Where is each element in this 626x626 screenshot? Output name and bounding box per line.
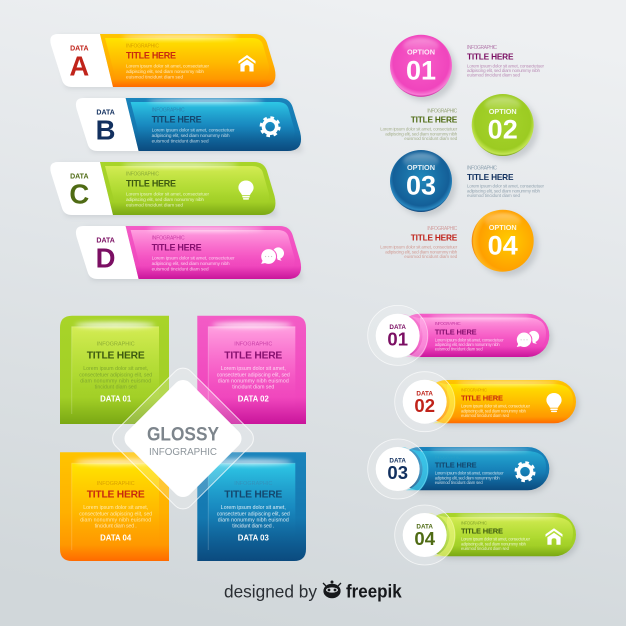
pill 02 orange: adipiscing elit, sed diam nonummy nibh bbox=[461, 408, 527, 413]
pill 01 pink: TITLE HERE bbox=[435, 327, 477, 336]
pill 04 green: 04 bbox=[414, 528, 436, 549]
option 02 text: adipiscing elit, sed diam nonummy nibh bbox=[385, 131, 458, 136]
option 04 text: Lorem ipsum dolor sit amet, consectetuer bbox=[380, 245, 458, 250]
text block A: INFOGRAPHIC bbox=[126, 43, 159, 49]
icon: freepik logo bbox=[323, 580, 341, 598]
pill 01 pink: adipiscing elit, sed diam nonummy nibh bbox=[435, 342, 500, 347]
text block B: TITLE HERE bbox=[152, 114, 202, 124]
pill 02 orange bbox=[395, 372, 579, 432]
text block C: Lorem ipsum dolor sit amet, consectetuer bbox=[126, 192, 209, 197]
panel: data 02 pink square bbox=[197, 316, 306, 424]
panel: data 01 green square: tincidunt diam sed bbox=[95, 385, 137, 391]
option 01 bbox=[390, 35, 456, 101]
panel: data 03 blue square: consectetuer adipiscing elit, sed bbox=[217, 511, 290, 517]
pill 04 green: adipiscing elit, sed diam nonummy nibh bbox=[461, 541, 527, 546]
banner A bbox=[50, 34, 277, 88]
option 01 text: INFOGRAPHIC bbox=[467, 45, 497, 51]
text block B: Lorem ipsum dolor sit amet, consectetuer bbox=[152, 128, 235, 133]
text block C: euismod tincidunt diam sed bbox=[126, 202, 183, 207]
icon: chat bbox=[261, 247, 284, 264]
pill 04 green: DATA bbox=[416, 523, 433, 530]
panel: data 04 orange square: tincidunt diam sed . bbox=[95, 524, 137, 530]
pill 03 blue: adipiscing elit, sed diam nonummy nibh bbox=[435, 475, 500, 480]
text block B: INFOGRAPHIC bbox=[152, 107, 185, 113]
text block C: adipiscing elit, sed diam nonummy nibh bbox=[126, 197, 204, 202]
panel: data 01 green square: INFOGRAPHIC bbox=[97, 342, 135, 348]
panel: data 04 orange square: consectetuer adipiscing elit, sed bbox=[79, 511, 152, 517]
label: data C: DATA bbox=[70, 174, 89, 181]
subheading: infographic: INFOGRAPHIC bbox=[149, 446, 217, 458]
center glossy diamond bbox=[108, 364, 258, 513]
panel: data 03 blue square: Lorem ipsum dolor sit amet, bbox=[221, 505, 286, 511]
text block C bbox=[126, 171, 209, 207]
option 02 text: euismod tincidunt diam sed bbox=[404, 136, 458, 141]
footer credit: designed by bbox=[224, 582, 317, 602]
pill 02 orange: 02 bbox=[414, 395, 435, 416]
option 03: OPTION bbox=[407, 163, 435, 172]
pill 04 green: Lorem ipsum dolor sit amet, consectetuer bbox=[461, 537, 531, 542]
option 02: OPTION bbox=[489, 107, 517, 116]
text block D: Lorem ipsum dolor sit amet, consectetuer bbox=[152, 256, 235, 261]
icon: house bbox=[238, 55, 256, 72]
option 03 text: euismod tincidunt diam sed bbox=[467, 193, 520, 198]
panel: data 03 blue square bbox=[197, 452, 306, 561]
text block D: TITLE HERE bbox=[152, 242, 202, 252]
banner C bbox=[50, 162, 277, 216]
icon: house bbox=[546, 528, 562, 545]
letter D: D bbox=[96, 243, 116, 274]
pill 02 orange: euismod tincidunt diam sed bbox=[461, 413, 510, 418]
panel: data 02 pink square: consectetuer adipiscing elit, sed bbox=[217, 372, 290, 378]
text block B: adipiscing elit, sed diam nonummy nibh bbox=[152, 133, 230, 138]
option 03 text: TITLE HERE bbox=[467, 172, 514, 182]
panel: data 02 pink square: TITLE HERE bbox=[224, 350, 282, 361]
text block D: INFOGRAPHIC bbox=[152, 235, 185, 241]
icon: bulb bbox=[546, 393, 562, 412]
text block A: Lorem ipsum dolor sit amet, consectetuer bbox=[126, 64, 209, 69]
panel: data 01 green square: DATA 01 bbox=[100, 395, 132, 404]
label: data B: DATA bbox=[96, 110, 115, 117]
pill 04 green: INFOGRAPHIC bbox=[461, 520, 487, 525]
panel: data 03 blue square: DATA 03 bbox=[238, 534, 269, 543]
pill 01 pink: 01 bbox=[387, 329, 408, 350]
option 02 text bbox=[380, 109, 458, 141]
option 03 text: adipiscing elit, sed diam nonummy nibh bbox=[467, 188, 540, 193]
footer credit bbox=[224, 580, 403, 602]
letter C: C bbox=[69, 179, 89, 210]
text block B bbox=[152, 107, 235, 143]
text block A: TITLE HERE bbox=[126, 50, 176, 60]
panel: data 04 orange square: DATA 04 bbox=[100, 534, 132, 543]
letter B: B bbox=[96, 115, 116, 146]
pill 04 green: euismod tincidunt diam sed bbox=[461, 546, 510, 551]
panel: data 03 blue square: tincidunt diam sed . bbox=[232, 524, 274, 530]
pill 03 blue: DATA bbox=[389, 457, 406, 464]
panel: data 04 orange square: Lorem ipsum dolor sit amet, bbox=[83, 505, 148, 511]
pill 03 blue: 03 bbox=[387, 462, 408, 483]
panel: data 01 green square: diam nonummy nibh euismod bbox=[80, 378, 151, 384]
option 01 text: euismod tincidunt diam sed bbox=[467, 73, 520, 78]
option 02 bbox=[472, 94, 538, 160]
option 02 text: Lorem ipsum dolor sit amet, consectetuer bbox=[380, 127, 458, 132]
text block D: euismod tincidunt diam sed bbox=[152, 266, 209, 271]
text block D bbox=[152, 235, 235, 271]
option 01 text: Lorem ipsum dolor sit amet, consectetuer bbox=[467, 63, 544, 68]
pill 04 green bbox=[395, 505, 579, 565]
option 01 text bbox=[467, 45, 544, 78]
option 04: OPTION bbox=[489, 223, 517, 232]
panel: data 04 orange square: INFOGRAPHIC bbox=[97, 481, 135, 487]
label: data A: DATA bbox=[70, 46, 89, 53]
pill 02 orange: DATA bbox=[416, 390, 433, 397]
panel: data 02 pink square: Lorem ipsum dolor sit amet, bbox=[221, 366, 286, 372]
text block D: adipiscing elit, sed diam nonummy nibh bbox=[152, 261, 230, 266]
option 01 text: TITLE HERE bbox=[467, 52, 514, 62]
icon: bulb bbox=[238, 180, 254, 200]
panel: data 01 green square: consectetuer adipiscing elit, sed bbox=[79, 372, 152, 378]
heading: glossy: GLOSSY bbox=[147, 424, 219, 446]
pill 03 blue: TITLE HERE bbox=[435, 461, 477, 470]
letter A: A bbox=[69, 51, 89, 82]
pill 01 pink: Lorem ipsum dolor sit amet, consectetuer bbox=[435, 337, 504, 342]
label: data D: DATA bbox=[96, 238, 115, 245]
pill 03 blue bbox=[368, 439, 552, 499]
panel: data 03 blue square: INFOGRAPHIC bbox=[234, 481, 272, 487]
option 02 text: INFOGRAPHIC bbox=[427, 109, 458, 115]
option 04 text bbox=[380, 226, 458, 259]
pill 02 orange: Lorem ipsum dolor sit amet, consectetuer bbox=[461, 404, 531, 409]
pill 02 orange: INFOGRAPHIC bbox=[461, 387, 487, 392]
banner B bbox=[76, 98, 303, 152]
option 03 bbox=[390, 150, 456, 216]
panel: data 03 blue square: TITLE HERE bbox=[224, 489, 282, 500]
text block A bbox=[126, 43, 209, 79]
option 03 text bbox=[467, 166, 544, 198]
footer credit: freepik bbox=[346, 582, 403, 602]
option 04 text: adipiscing elit, sed diam nonummy nibh bbox=[385, 249, 458, 254]
text block C: TITLE HERE bbox=[126, 178, 176, 188]
option 04 text: euismod tincidunt diam sed bbox=[404, 254, 458, 259]
pill 02 orange: TITLE HERE bbox=[461, 394, 503, 403]
text block B: euismod tincidunt diam sed bbox=[152, 138, 209, 143]
panel: data 01 green square: TITLE HERE bbox=[87, 350, 145, 361]
panel: data 02 pink square: tincidunt diam sed bbox=[232, 385, 274, 391]
pill 01 pink: euismod tincidunt diam sed bbox=[435, 347, 483, 352]
pill 03 blue: Lorem ipsum dolor sit amet, consectetuer bbox=[435, 471, 504, 476]
icon: chat bbox=[517, 331, 539, 347]
panel: data 03 blue square: diam nonummy nibh euismod bbox=[218, 518, 289, 524]
panel: data 02 pink square: DATA 02 bbox=[238, 395, 269, 404]
option 02: 02 bbox=[488, 114, 518, 144]
pill 01 pink bbox=[368, 305, 552, 365]
pill 01 pink: INFOGRAPHIC bbox=[435, 321, 461, 326]
option 04 text: TITLE HERE bbox=[411, 233, 458, 243]
text block A: adipiscing elit, sed diam nonummy nibh bbox=[126, 69, 204, 74]
panel: data 01 green square bbox=[60, 316, 169, 424]
option 04 bbox=[472, 210, 538, 276]
panel: data 04 orange square: TITLE HERE bbox=[87, 489, 145, 500]
banner D bbox=[76, 226, 303, 280]
panel: data 02 pink square: diam nonummy nibh euismod bbox=[218, 378, 289, 384]
pill 04 green: TITLE HERE bbox=[461, 527, 503, 536]
pill 03 blue: euismod tincidunt diam sed bbox=[435, 480, 483, 485]
panel: data 01 green square: Lorem ipsum dolor sit amet, bbox=[83, 366, 148, 372]
text block A: euismod tincidunt diam sed bbox=[126, 74, 183, 79]
panel: data 04 orange square: diam nonummy nibh euismod bbox=[80, 518, 151, 524]
option 04 text: INFOGRAPHIC bbox=[427, 226, 458, 232]
panel: data 04 orange square bbox=[60, 452, 169, 561]
option 01: OPTION bbox=[407, 47, 435, 56]
panel: data 02 pink square: INFOGRAPHIC bbox=[234, 342, 272, 348]
option 01: 01 bbox=[406, 55, 436, 85]
option 02 text: TITLE HERE bbox=[411, 115, 458, 125]
option 03 text: INFOGRAPHIC bbox=[467, 166, 497, 172]
icon: gear bbox=[261, 118, 279, 136]
pill 03 blue: INFOGRAPHIC bbox=[435, 454, 461, 459]
pill 01 pink: DATA bbox=[389, 324, 406, 331]
option 03: 03 bbox=[406, 170, 436, 200]
option 03 text: Lorem ipsum dolor sit amet, consectetuer bbox=[467, 184, 544, 189]
option 01 text: adipiscing elit, sed diam nonummy nibh bbox=[467, 68, 540, 73]
icon: gear bbox=[516, 463, 534, 481]
text block C: INFOGRAPHIC bbox=[126, 171, 159, 177]
option 04: 04 bbox=[488, 230, 518, 260]
